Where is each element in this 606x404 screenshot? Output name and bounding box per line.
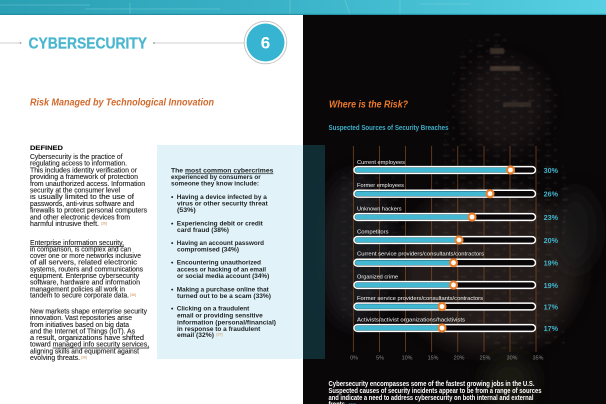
text block: new markets: New markets shape enterprise security [30,309,148,316]
panel: most common cybercrimes: [37] [216,332,222,336]
panel: most common cybercrimes: Having an account password [177,240,264,247]
text block: chart takeaway: Suspected causes of security incidents appear to be from a range of sources [328,388,542,395]
text block: new markets [30,309,149,362]
panel: most common cybercrimes [157,145,325,359]
panel: most common cybercrimes: access or hacking of an email [177,266,266,273]
chart axis labels: 20% [454,356,465,362]
panel: most common cybercrimes: Clicking on a fraudulent [177,306,250,313]
panel: most common cybercrimes: • [171,240,174,247]
panel: most common cybercrimes: virus or other security threat [177,201,268,208]
text block: new markets: aligning skills and equipment against [30,348,139,355]
bar: competitors: Competitors [357,229,389,235]
panel: most common cybercrimes: • [171,220,174,227]
bar: unknown hackers: Unknown hackers [357,206,402,212]
chart axis labels: 0% [350,356,358,362]
text block: new markets: a result, organizations have shifted [30,335,144,342]
panel: most common cybercrimes: compromised (34%) [177,247,239,254]
text block: new markets: evolving threats. [30,355,80,362]
bar: activists: Activists/activist organizations/hacktivists [357,318,465,324]
text block: defined: from unauthorized access. Information [30,181,145,188]
text block: defined: harmful intrusive theft. [30,221,99,228]
text block: defined: DEFINED [30,145,63,152]
bar: current employees: Current employees [357,160,405,166]
section title: CYBERSECURITY [28,35,148,52]
bar: current service providers [354,252,559,268]
top banner [0,0,606,15]
text block: enterprise information security: of all servers, related electronic [30,260,138,267]
text block: chart takeaway [328,381,542,404]
text block: defined: is usually limited to the use of [30,194,134,201]
chart axis labels [350,356,544,362]
panel: most common cybercrimes: or social media account (34%) [177,273,269,280]
panel: most common cybercrimes: experienced by consumers or [171,174,261,181]
text block: chart takeaway: and indicate a need to address cybersecurity on both internal and external [328,395,534,402]
bar: current employees [354,160,559,175]
panel: most common cybercrimes: Encountering unauthorized [177,260,261,267]
bar: former employees: Former employees [357,183,404,189]
left subtitle: Risk Managed by Technological Innovation [30,98,214,108]
text block: new markets: toward managed info security services, [30,342,149,349]
bar: unknown hackers: 23% [544,213,559,222]
bar: organized crime: Organized crime [357,274,398,280]
bar: activists [354,318,559,333]
text block: defined: and other electronic devices from [30,214,130,221]
panel: most common cybercrimes: turned out to be a scam (33%) [177,293,271,300]
text block: enterprise information security: systems, routers and communications [30,266,144,273]
text block: defined: regulating access to information. [30,161,127,168]
text block: defined: [36] [101,222,107,226]
bar: competitors: 20% [544,236,559,245]
panel: most common cybercrimes: Having a device infected by a [177,194,267,201]
bar: current service providers: Current service providers/consultants/contractors [357,252,484,258]
text block: enterprise information security: tandem to secure corporate data. [30,293,129,300]
text block: defined: security at the consumer level [30,188,120,194]
chart axis labels: 10% [402,356,413,362]
dark right page [303,15,606,404]
bar chart: suspected sources of security breaches [350,146,559,362]
panel: most common cybercrimes: Making a purchase online that [177,286,269,293]
panel: most common cybercrimes: email (32%) [177,332,214,339]
bar: organized crime: 19% [544,281,559,290]
text block: new markets: and the Internet of Things (IoT). As [30,328,136,335]
bar: former service providers [354,296,559,312]
text block: enterprise information security: in comparison, is complex and can [30,246,131,253]
number badge [244,21,287,64]
text block: defined: passwords, anti-virus software and [30,201,134,208]
text block: enterprise information security: software, hardware and information [30,280,140,287]
text block: defined: This includes identity verification or [30,167,138,174]
bar: former service providers: 17% [544,302,559,312]
text block: new markets: from initiatives based on big data [30,322,129,329]
text block: new markets: [36] [81,356,87,360]
chart axis labels: 15% [428,356,439,362]
panel: most common cybercrimes: email or providing sensitive [177,312,263,319]
text block: chart takeaway: Cybersecurity encompasses some of the fastest growing jobs in the U.S. [328,381,535,388]
text block: new markets: innovation. Vast repositories arise [30,315,132,322]
panel: most common cybercrimes: card fraud (38%) [177,227,229,234]
text block: defined [30,145,148,228]
bar: former service providers: Former service providers/consultants/contractors [357,296,483,302]
bar: competitors [354,229,559,245]
panel: most common cybercrimes: • [171,194,174,201]
panel: most common cybercrimes: information (personal/financial) [177,319,276,326]
text block: enterprise information security: equipment. Enterprise cybersecurity [30,273,140,280]
text block: enterprise information security [30,240,144,300]
right heading: Where is the Risk? [329,100,408,110]
panel: most common cybercrimes: The most common cybercrimes [171,167,274,174]
text block: defined: Cybersecurity is the practice of [30,154,123,161]
panel: most common cybercrimes: someone they know include: [171,181,259,188]
text block: defined: firewalls to protect personal computers [30,208,148,215]
text block: enterprise information security: Enterprise information security, [30,240,124,247]
bar: organized crime [354,274,559,290]
bar: current service providers: 19% [544,259,559,268]
chart title: Suspected Sources of Security Breaches [328,125,449,132]
bar: current employees: 30% [544,166,559,175]
panel: most common cybercrimes: (53%) [177,207,196,214]
bar: former employees: 26% [544,190,559,199]
chart axis labels: 30% [507,356,518,362]
text block: defined: providing a framework of protection [30,174,138,181]
number badge: 6 [261,34,270,53]
bar: activists: 17% [544,324,559,333]
text block: enterprise information security: cover one or more networks inclusive [30,253,141,260]
bar: former employees [354,183,559,199]
bar: unknown hackers [354,206,559,222]
panel: most common cybercrimes: Experiencing debit or credit [177,220,264,227]
chart axis labels: 35% [533,356,544,362]
panel: most common cybercrimes: • [171,306,174,313]
panel: most common cybercrimes: in response to a fraudulent [177,326,261,333]
chart axis labels: 25% [480,356,491,362]
panel: most common cybercrimes: • [171,260,174,267]
panel: most common cybercrimes: • [171,286,174,293]
chart axis labels: 5% [376,356,384,362]
text block: enterprise information security: management policies all work in [30,286,125,293]
text block: enterprise information security: [36] [130,293,136,297]
